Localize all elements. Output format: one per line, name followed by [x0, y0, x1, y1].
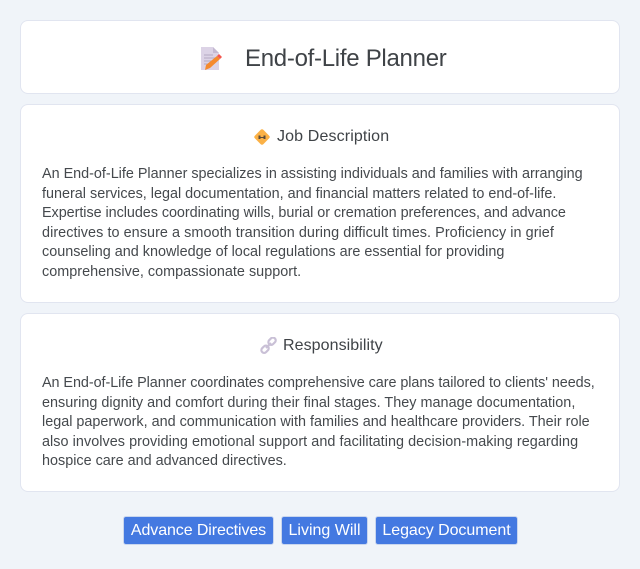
icon: link	[260, 337, 277, 354]
panel: job description	[20, 104, 620, 303]
tag: advance directives: Advance Directives	[131, 522, 266, 539]
heading: job description: Job Description	[277, 128, 389, 145]
panel: responsibility	[20, 313, 620, 492]
text block: job description: counseling and knowledge of local regulations are essential for providing	[42, 244, 504, 260]
tag: living will: Living Will	[288, 522, 360, 539]
text block: responsibility: also involves providing emotional support and facilitating decision-making regarding	[42, 434, 578, 450]
text block: job description: directives to ensure a smooth transition during difficult times. Proficiency in grief	[42, 225, 554, 241]
text block: job description	[42, 166, 583, 280]
icon: document with pencil	[201, 47, 222, 70]
text block: responsibility: legal paperwork, and communication with families and healthcare providers. Their role	[42, 414, 590, 430]
header panel	[20, 20, 620, 94]
text block: job description: funeral services, legal documentation, and financial matters related to end-of-life.	[42, 186, 556, 202]
text block: responsibility: An End-of-Life Planner coordinates comprehensive care plans tailored to clients' needs,	[42, 375, 595, 391]
title: End-of-Life Planner	[245, 45, 446, 72]
tag: legacy document	[375, 516, 518, 545]
text block: responsibility: ensuring dignity and comfort during their final stages. They manage documentation,	[42, 395, 575, 411]
heading: responsibility: Responsibility	[283, 337, 383, 354]
tag: legacy document: Legacy Document	[382, 522, 511, 539]
icon: diamond sign	[254, 129, 270, 145]
text block: responsibility: hospice care and advanced directives.	[42, 453, 287, 469]
text block: job description: Expertise includes coordinating wills, burial or cremation preferences, and advance	[42, 205, 566, 221]
tag: advance directives	[123, 516, 274, 545]
text block: job description: An End-of-Life Planner specializes in assisting individuals and families with arranging	[42, 166, 583, 182]
tag: living will	[281, 516, 368, 545]
text block: responsibility	[42, 375, 595, 469]
text block: job description: comprehensive, compassionate support.	[42, 264, 301, 280]
